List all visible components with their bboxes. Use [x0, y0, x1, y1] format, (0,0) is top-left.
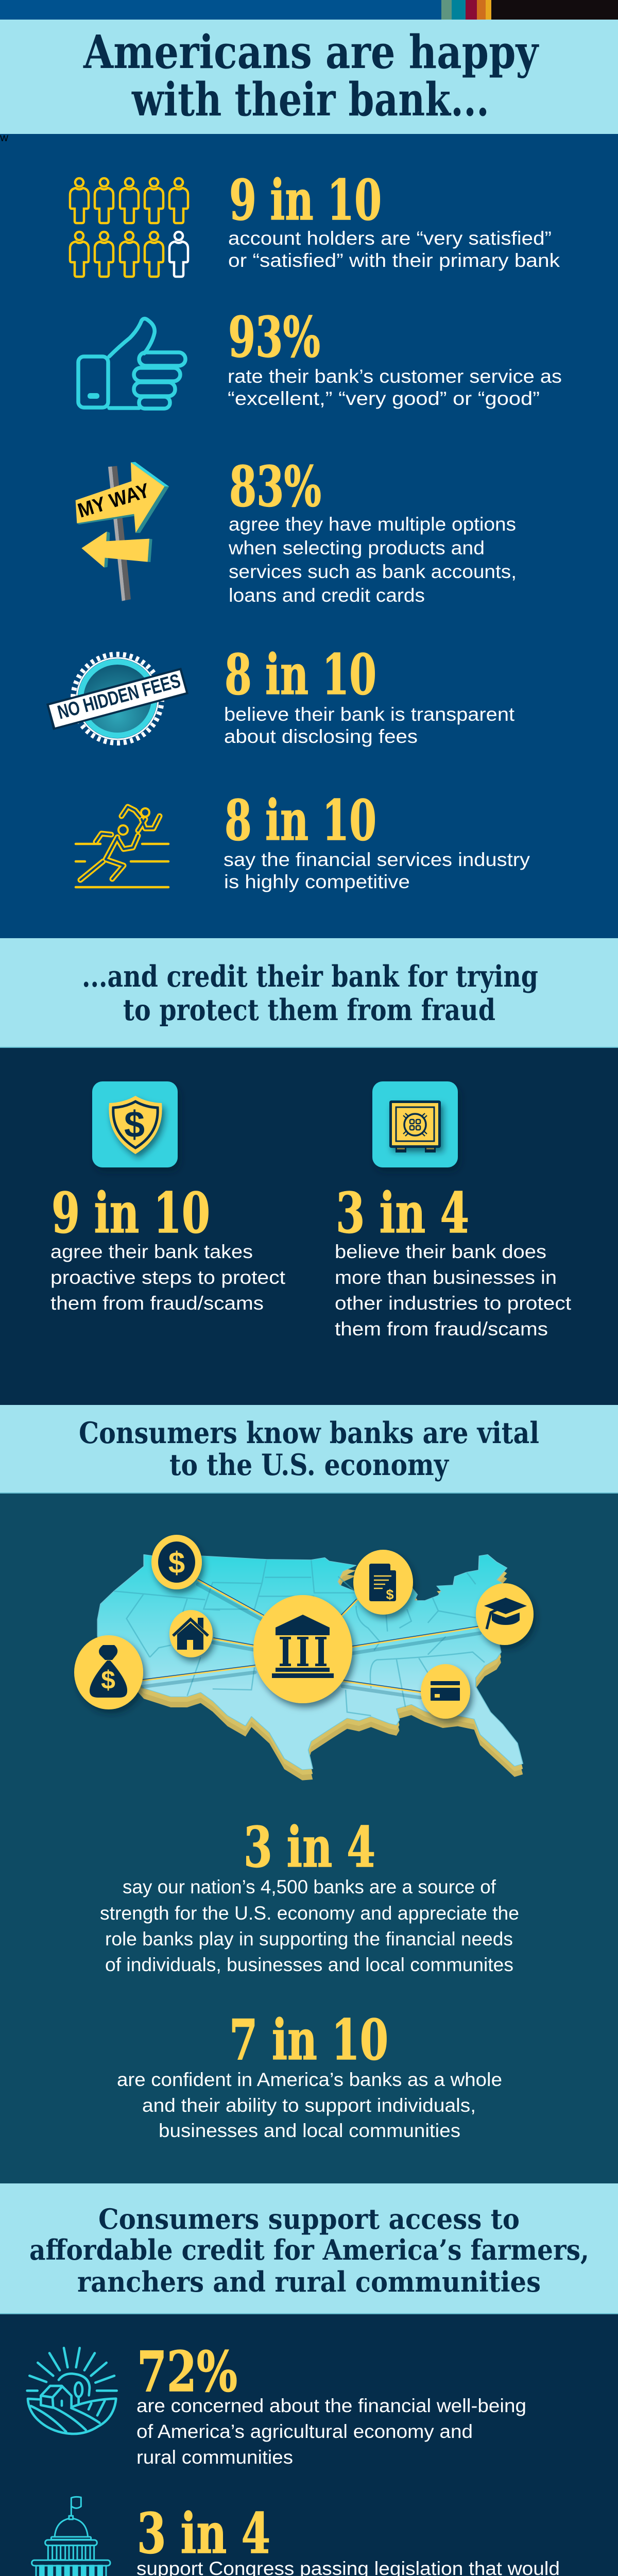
stat: 3 in 4 more than other industries: believe their bank does	[335, 1241, 546, 1262]
stat: 8 in 10 competitive: is highly competitive	[224, 871, 410, 892]
stat: 8 in 10 transparent fees	[224, 642, 515, 747]
stat: 83% multiple options: agree they have multiple options	[229, 514, 516, 535]
panel: economy	[0, 1494, 618, 2183]
stat: 72% concerned	[136, 2340, 526, 2468]
connector lines	[142, 1579, 480, 1698]
heading: Americans are happy: Americans are happy	[83, 25, 539, 79]
icon: thumbs up	[78, 318, 185, 409]
stat: 7 in 10 confident: and their ability to support individuals,	[142, 2095, 476, 2116]
top color band	[0, 0, 618, 20]
stat: 7 in 10 confident	[117, 2008, 502, 2141]
icon: ten people	[70, 178, 188, 277]
stat: 72% concerned: are concerned about the financial well-being	[136, 2395, 526, 2416]
stat: 9 in 10 satisfied: account holders are “very satisfied”	[228, 228, 552, 249]
heading: affordable credit for farmers	[0, 2183, 618, 2314]
icon: no hidden fees badge: NO HIDDEN FEES	[55, 670, 183, 724]
heading: affordable credit for farmers: Consumers support access to	[98, 2202, 520, 2235]
panel: rural credit	[0, 2314, 618, 2576]
stat: 7 in 10 confident: 7 in 10	[229, 2008, 388, 2073]
stat: 83% multiple options	[228, 454, 517, 606]
heading: Americans are happy	[0, 20, 618, 134]
icon: credit card circle	[421, 1664, 470, 1719]
icon: graduation cap circle	[476, 1583, 534, 1645]
stat: 3 in 4 source of strength: say our nation’s 4,500 banks are a source of	[123, 1876, 496, 1897]
stat: 9 in 10 satisfied	[228, 168, 560, 271]
icon: safe tile	[372, 1081, 458, 1167]
heading: banks vital to the economy: to the U.S. economy	[169, 1448, 450, 1482]
stat: 9 in 10 proactive: agree their bank takes	[50, 1241, 253, 1262]
heading: credit their bank for fraud protection	[0, 938, 618, 1048]
icon: my way signpost: MY WAY	[75, 479, 152, 522]
heading: credit their bank for fraud protection: ...and credit their bank for trying	[82, 959, 538, 994]
icon: farm and sun	[27, 2348, 117, 2434]
icon: capitol building	[30, 2497, 112, 2576]
stat: 8 in 10 competitive: 8 in 10	[225, 788, 376, 853]
stat: 9 in 10 proactive	[50, 1181, 286, 1314]
stat: 9 in 10 satisfied: or “satisfied” with their primary bank	[228, 250, 560, 271]
stat: 72% concerned: 72%	[137, 2340, 237, 2404]
icon: no hidden fees badge	[46, 654, 188, 743]
icon: shield tile: $	[124, 1104, 145, 1145]
stat: 3 in 4 more than other industries: them from fraud/scams	[335, 1318, 548, 1340]
stat: 9 in 10 satisfied: 9 in 10	[229, 168, 382, 233]
stat: 72% concerned: rural communities	[136, 2447, 293, 2468]
stat: 93% customer service	[228, 305, 562, 409]
stat: 83% multiple options: loans and credit cards	[229, 585, 425, 606]
stat: 93% customer service: rate their bank’s customer service as	[228, 366, 562, 387]
stat: 3 in 4 more than other industries: 3 in 4	[336, 1181, 469, 1246]
stat: 8 in 10 competitive	[224, 788, 530, 892]
stat: 8 in 10 transparent fees: about disclosing fees	[224, 726, 418, 747]
icon: shield tile	[92, 1081, 178, 1167]
icon: my way signpost	[75, 462, 169, 601]
icon: document circle: $	[386, 1587, 394, 1602]
panel: satisfaction stats: W	[0, 133, 8, 143]
stat: 83% multiple options: services such as bank accounts,	[229, 561, 517, 582]
heading: banks vital to the economy	[0, 1405, 618, 1494]
map of the United States	[97, 1554, 523, 1781]
stat: 8 in 10 transparent fees: 8 in 10	[225, 642, 376, 707]
heading: affordable credit for farmers: ranchers and rural communities	[77, 2265, 541, 2298]
stat: 3 in 4 source of strength: of individuals, businesses and local communites	[105, 1954, 513, 1975]
stat: 8 in 10 competitive: say the financial services industry	[224, 849, 530, 870]
stat: 3 in 4 source of strength	[100, 1815, 519, 1975]
heading: credit their bank for fraud protection: to protect them from fraud	[123, 993, 495, 1027]
stat: 9 in 10 proactive: 9 in 10	[52, 1181, 210, 1246]
stat: 7 in 10 confident: businesses and local communities	[159, 2120, 460, 2141]
icon: money bag circle: $	[101, 1666, 115, 1694]
stat: 3 in 4 source of strength: strength for the U.S. economy and appreciate the	[100, 1903, 519, 1924]
stat: 3 in 4 more than other industries	[335, 1181, 572, 1340]
stat: 3 in 4 more than other industries: more than businesses in	[335, 1267, 557, 1288]
chart: US map with bank network	[74, 1535, 534, 1781]
icon: runners	[76, 807, 168, 887]
stat: 7 in 10 confident: are confident in America’s banks as a whole	[117, 2069, 502, 2090]
icon: money bag circle	[74, 1635, 143, 1709]
stat: 72% concerned: of America’s agricultural economy and	[136, 2421, 473, 2442]
stat: 3 in 4 support Congress: 3 in 4	[137, 2501, 270, 2566]
panel: satisfaction stats	[0, 133, 618, 938]
icon: bank circle	[253, 1595, 352, 1703]
stat: 3 in 4 support Congress	[136, 2501, 562, 2576]
stat: 83% multiple options: when selecting products and	[228, 537, 485, 558]
stat: 3 in 4 source of strength: 3 in 4	[244, 1815, 375, 1880]
heading: banks vital to the economy: Consumers know banks are vital	[79, 1416, 539, 1450]
stat: 93% customer service: 93%	[228, 305, 320, 370]
panel: fraud protection stats	[0, 1048, 618, 1405]
stat: 9 in 10 proactive: proactive steps to protect	[50, 1267, 286, 1288]
icon: document circle	[353, 1550, 413, 1615]
stat: 93% customer service: “excellent,” “very good” or “good”	[228, 388, 540, 409]
stat: 8 in 10 transparent fees: believe their bank is transparent	[224, 704, 515, 725]
stat: 83% multiple options: 83%	[229, 454, 321, 519]
icon: dollar circle	[151, 1535, 202, 1589]
stat: 3 in 4 more than other industries: other industries to protect	[335, 1293, 572, 1314]
stat: 3 in 4 source of strength: role banks play in supporting the financial needs	[105, 1928, 513, 1950]
stat: 9 in 10 proactive: them from fraud/scams	[50, 1293, 264, 1314]
icon: house circle	[169, 1610, 213, 1657]
heading: Americans are happy: with their bank...	[131, 72, 489, 126]
icon: dollar circle: $	[168, 1546, 185, 1580]
